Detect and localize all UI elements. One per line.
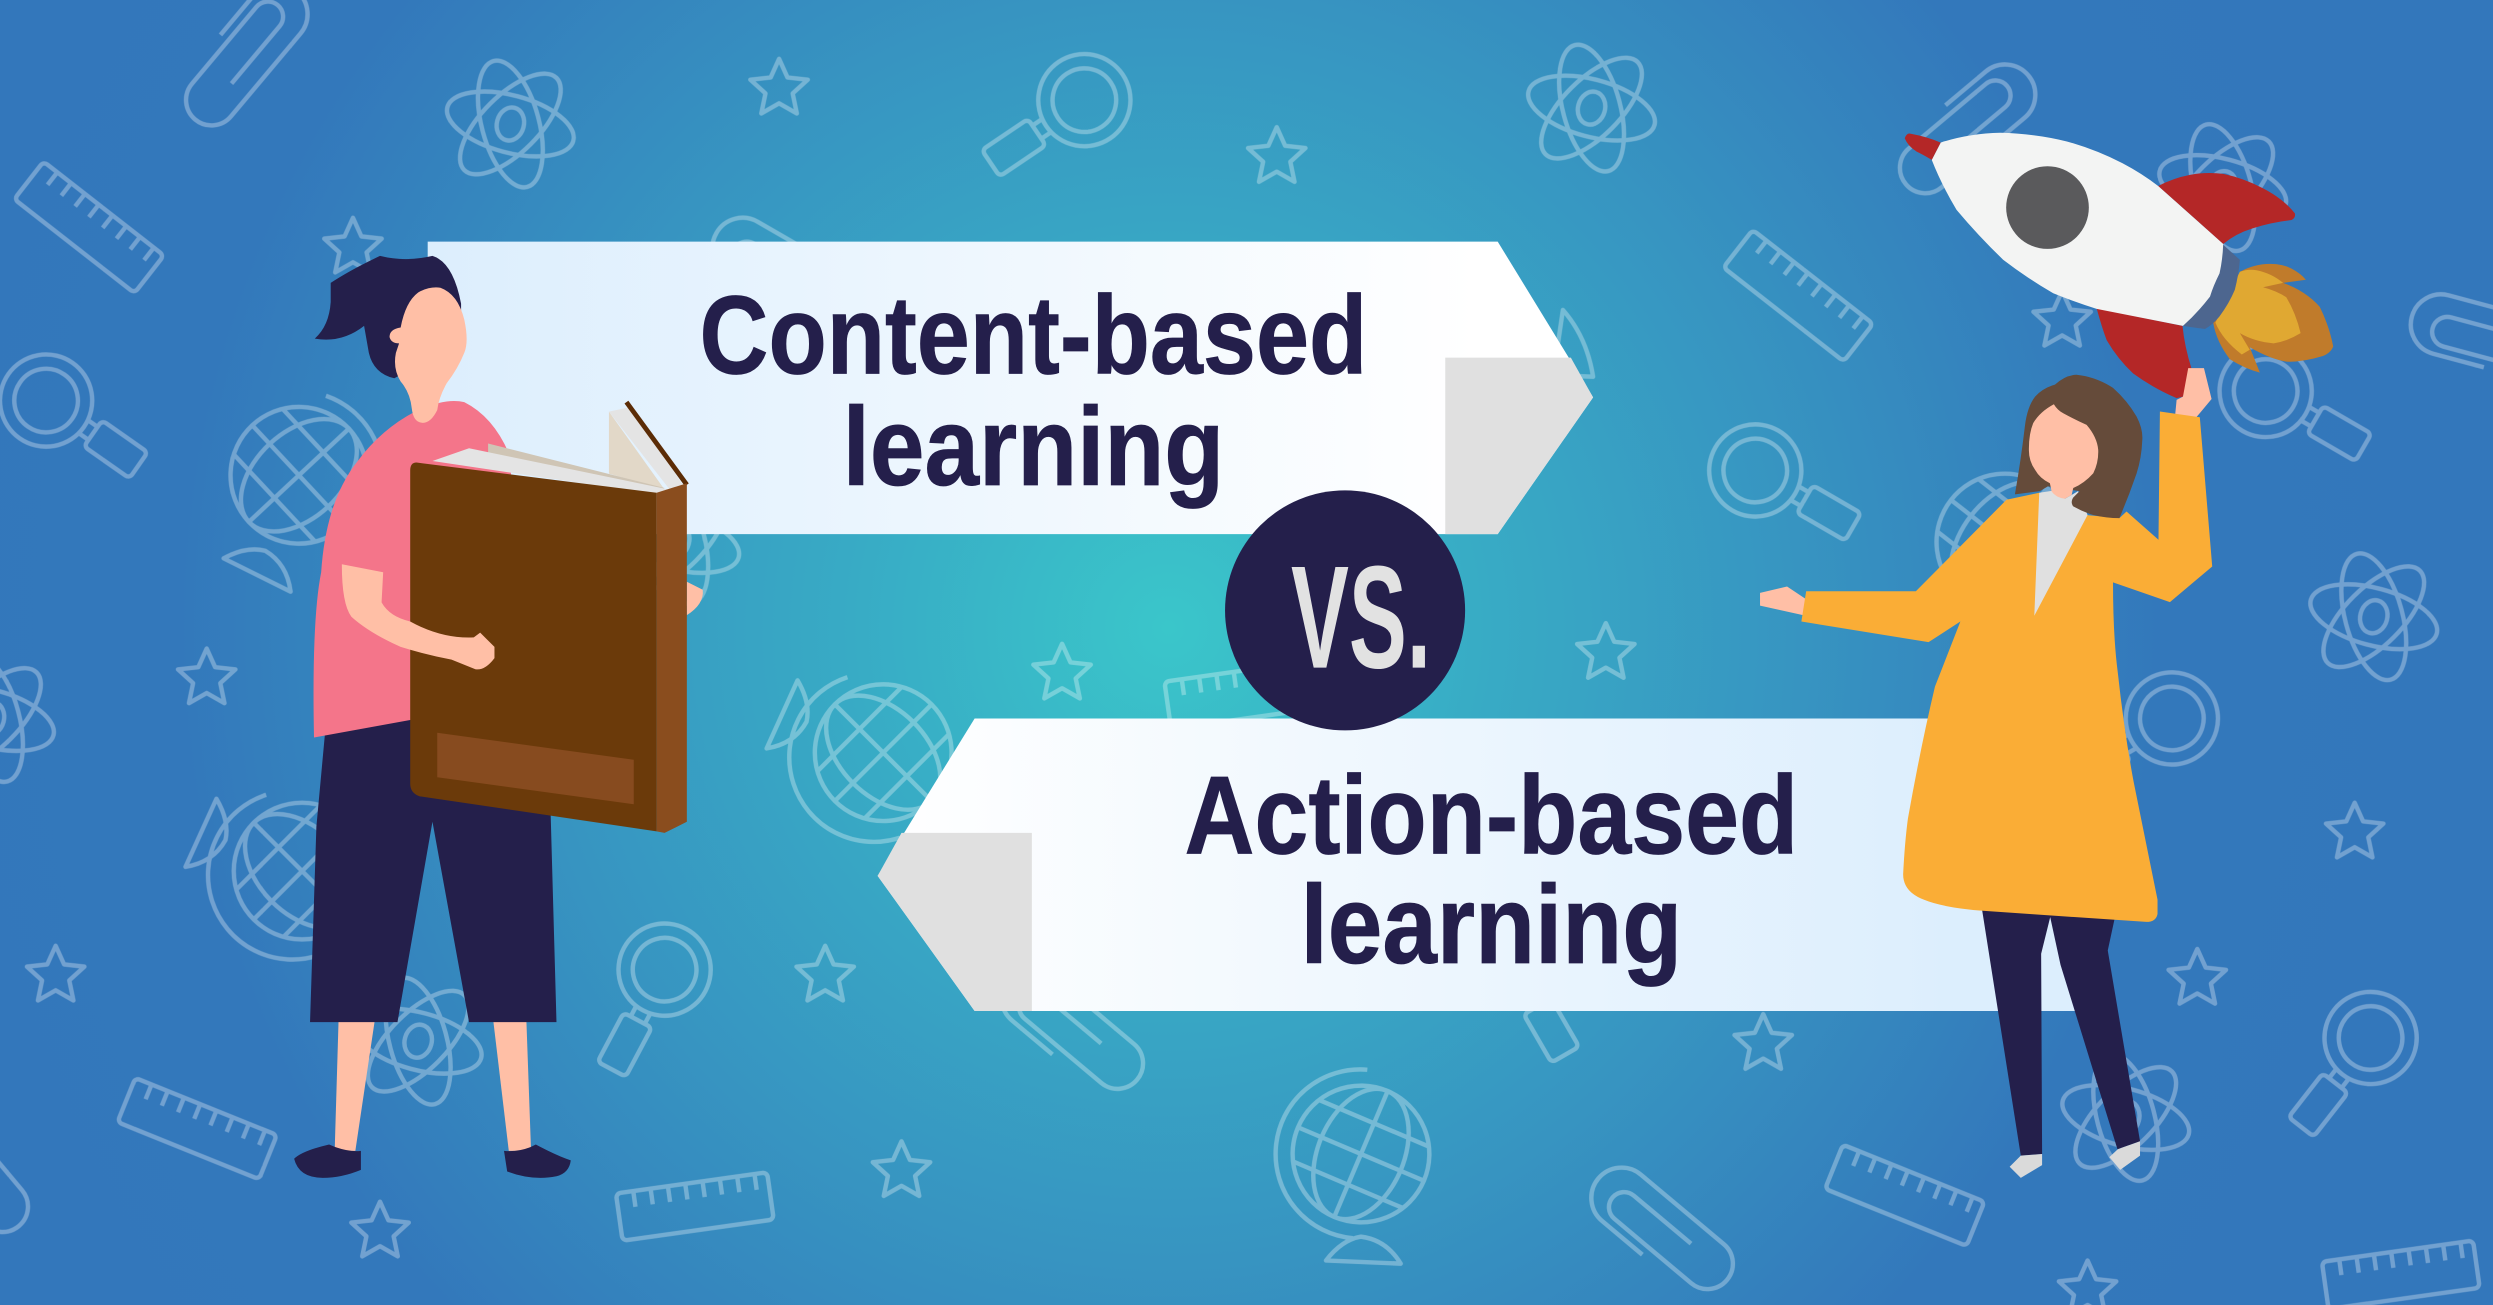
heading: action-based learning: learning bbox=[1301, 862, 1682, 987]
woman coat bbox=[1801, 412, 2212, 922]
icon: star bbox=[1734, 1014, 1792, 1069]
banner fold bbox=[1445, 358, 1593, 534]
icon: paperclip bbox=[1579, 1155, 1743, 1305]
icon: star bbox=[2169, 949, 2226, 1004]
icon: atom bbox=[1510, 23, 1673, 193]
man far hand bbox=[687, 582, 703, 615]
man shoes bbox=[294, 1144, 571, 1178]
icon: magnifier bbox=[2265, 973, 2435, 1155]
icon: atom bbox=[429, 39, 592, 209]
icon: magnifier behind banner bbox=[1446, 894, 1605, 1078]
banner: action-based learning bbox=[878, 718, 2076, 1011]
badge: VS. bbox=[1225, 490, 1465, 730]
icon: paperclip bbox=[1883, 52, 2048, 204]
icon: magnifier bbox=[1692, 408, 1876, 567]
icon: ruler bbox=[14, 162, 164, 293]
figure: man holding book bbox=[294, 256, 703, 1178]
icon: star bbox=[351, 1202, 409, 1256]
icon: star bbox=[2059, 1260, 2116, 1305]
icon: star bbox=[2033, 291, 2091, 346]
man hair bbox=[315, 256, 461, 378]
rocket bottom fin bbox=[2097, 308, 2192, 398]
woman shoes bbox=[2010, 1141, 2140, 1178]
icon: ruler bbox=[117, 1078, 277, 1179]
man shorts bbox=[310, 707, 556, 1022]
icon: magnifier bbox=[2203, 328, 2386, 487]
book label bbox=[437, 733, 634, 804]
icon: globe bbox=[1271, 1064, 1451, 1264]
rocket bbox=[1905, 133, 2333, 398]
man shirt bbox=[314, 401, 541, 747]
man legs bbox=[335, 1017, 531, 1151]
icon: star bbox=[1033, 644, 1091, 698]
heading: content-based learning: learning bbox=[843, 384, 1224, 509]
woman hair bbox=[2015, 375, 2142, 518]
rocket flame bbox=[2213, 264, 2333, 373]
woman trousers bbox=[1982, 909, 2140, 1156]
icon: magnifier bbox=[0, 336, 165, 503]
icon: star bbox=[178, 649, 235, 703]
woman scarf bbox=[2034, 491, 2088, 616]
heading: content-based learning: Content-based bbox=[700, 273, 1367, 398]
icon: paperclip bbox=[2404, 288, 2493, 388]
icon: star bbox=[750, 59, 808, 113]
icon: ruler bbox=[616, 1172, 774, 1241]
icon: atom bbox=[0, 633, 72, 804]
rocket top fin bbox=[2158, 173, 2295, 244]
icon: magnifier bbox=[571, 907, 727, 1091]
icon: star bbox=[1248, 127, 1305, 182]
open book pages bbox=[432, 402, 687, 494]
woman hands bbox=[1760, 368, 2212, 615]
rocket window bbox=[2006, 166, 2089, 249]
icon: globe behind woman bbox=[1895, 432, 2115, 652]
man arm bbox=[342, 564, 494, 669]
rocket engine bbox=[2183, 245, 2240, 329]
rocket body bbox=[1932, 133, 2223, 326]
icon: star bbox=[324, 218, 382, 272]
icon: star bbox=[796, 946, 854, 1000]
icon: ruler bbox=[1723, 230, 1873, 361]
icon: atom bbox=[2044, 1032, 2207, 1203]
banner fold bbox=[878, 833, 1032, 1011]
icon: magnifier bbox=[2051, 655, 2235, 815]
book spine bbox=[657, 483, 687, 833]
icon: globe bbox=[167, 747, 419, 988]
icon: globe bbox=[748, 628, 1000, 869]
rocket nose bbox=[1905, 134, 1941, 160]
icon: globe bbox=[172, 357, 417, 612]
icon: ruler bbox=[1164, 660, 1322, 729]
icon: globe stand fragment bbox=[1553, 310, 1593, 377]
icon: star bbox=[2326, 803, 2383, 857]
banner: content-based learning bbox=[428, 242, 1593, 534]
icon: magnifier bbox=[965, 36, 1148, 201]
icon: paperclip bbox=[701, 207, 873, 341]
icon: ruler bbox=[2322, 1241, 2480, 1305]
heading: action-based learning bbox=[1184, 753, 1798, 987]
heading: content-based learning bbox=[700, 273, 1367, 509]
icon: atom bbox=[2141, 102, 2304, 273]
icon: ruler bbox=[1825, 1145, 1984, 1246]
icon: atom bbox=[594, 455, 757, 626]
icon: atom bbox=[337, 956, 499, 1126]
figure: woman with rocket bbox=[1760, 133, 2333, 1178]
icon: atom bbox=[2292, 532, 2455, 702]
man face and neck bbox=[390, 287, 467, 423]
heading: action-based learning: Action-based bbox=[1184, 753, 1798, 878]
badge: VS.: VS. bbox=[1291, 536, 1431, 699]
book cover bbox=[410, 463, 657, 831]
icon: star bbox=[873, 1141, 930, 1196]
icon: paperclip bbox=[989, 955, 1153, 1107]
icon: paperclip bbox=[168, 0, 320, 136]
woman face bbox=[2029, 404, 2098, 499]
icon: paperclip bbox=[0, 1084, 38, 1248]
icon: star bbox=[1577, 623, 1635, 678]
icon: star bbox=[27, 946, 84, 1000]
